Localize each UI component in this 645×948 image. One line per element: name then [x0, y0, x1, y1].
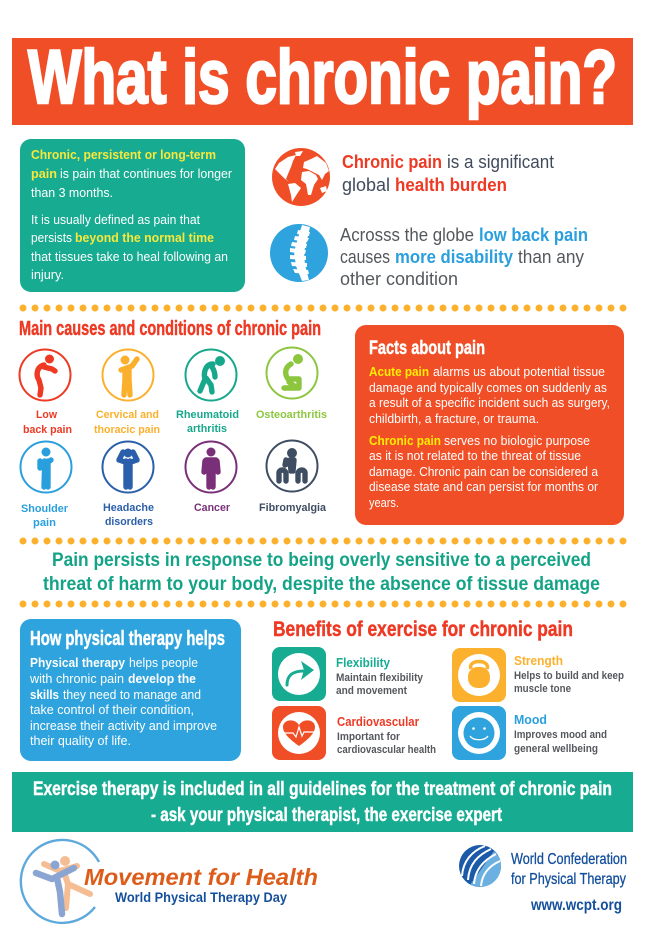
text: global health burden: health burden — [395, 175, 507, 195]
text: global health burden: is a significant — [447, 152, 554, 172]
label: osteoarthritis: Osteoarthritis — [256, 409, 327, 421]
panel: facts about pain — [355, 325, 624, 525]
icon: flexibility arrow — [272, 647, 326, 701]
panel: definition of chronic pain — [20, 139, 245, 292]
icon: low back pain — [20, 350, 70, 400]
text: pain persists statement — [43, 550, 600, 595]
logo: movement for health: Movement for Health — [84, 864, 318, 890]
text: acute pain: childbirth, a fracture, or trauma. — [369, 412, 539, 426]
logo: movement for health — [21, 840, 318, 923]
icon: strength kettlebell — [452, 648, 506, 702]
label: rheumatoid arthritis: arthritis — [187, 423, 227, 435]
label: low back pain: Low — [36, 409, 57, 421]
icon: globe — [272, 148, 330, 206]
label: fibromyalgia: Fibromyalgia — [259, 502, 327, 514]
label: low back pain: back pain — [23, 424, 72, 436]
text: physical therapy description: Physical therapy — [30, 655, 126, 670]
label: cervical and thoracic pain: thoracic pain — [94, 424, 160, 436]
text: global health burden: Chronic pain — [342, 152, 442, 172]
label: rheumatoid arthritis — [176, 409, 239, 435]
text: pain persists statement: Pain persists in response to being overly sensitive to a perceived — [52, 550, 591, 571]
text: mood — [514, 712, 607, 755]
label: shoulder pain: pain — [33, 517, 56, 529]
text: flexibility — [336, 655, 424, 697]
text: mood: Mood — [514, 712, 547, 727]
text: chronic pain: disease state and can persist for months or — [369, 480, 598, 494]
banner: exercise therapy — [12, 772, 633, 832]
text: physical therapy description — [29, 655, 217, 748]
logo: world confederation for physical therapy: www.wcpt.org — [530, 897, 622, 914]
banner: exercise therapy: - ask your physical therapist, the exercise expert — [151, 804, 502, 826]
text: physical therapy description: increase their activity and improve — [30, 718, 217, 733]
text: physical therapy description: with chronic pain — [29, 671, 124, 686]
text: cardiovascular: Cardiovascular — [337, 714, 419, 729]
text: chronic pain — [369, 434, 598, 510]
text: physical therapy description: helps people — [129, 655, 198, 670]
text: cardiovascular — [337, 714, 436, 756]
label: shoulder pain: Shoulder — [21, 503, 69, 515]
text: strength — [514, 653, 624, 695]
text: chronic pain: damage. Chronic pain can be considered a — [369, 465, 598, 479]
label: shoulder pain — [21, 503, 69, 529]
text: physical therapy description: skills — [30, 687, 59, 702]
text: low back pain disability: Acrosss the globe — [340, 225, 474, 245]
icon: rheumatoid arthritis — [186, 350, 236, 400]
text: physical therapy description: their quality of life. — [30, 733, 131, 748]
text: physical therapy description: develop the — [128, 671, 196, 686]
text: chronic pain: as it is not related to the threat of tissue — [369, 449, 581, 463]
icon: headache disorders — [102, 442, 154, 492]
text: low back pain disability: low back pain — [479, 225, 588, 245]
text: strength: muscle tone — [514, 683, 571, 695]
icon: spine — [270, 224, 328, 282]
panel: definition of chronic pain: is pain that continues for longer — [60, 167, 232, 181]
text: chronic pain: serves no biologic purpose — [444, 434, 590, 448]
label: cervical and thoracic pain: Cervical and — [96, 409, 159, 421]
panel: how physical therapy helps — [20, 619, 241, 761]
label: headache disorders — [103, 502, 154, 528]
panel: benefits of exercise — [272, 647, 624, 760]
text: low back pain disability — [340, 225, 588, 289]
label: headache disorders: Headache — [103, 502, 154, 514]
icon: fibromyalgia — [266, 440, 318, 492]
text: acute pain: Acute pain — [369, 365, 429, 379]
text: flexibility: and movement — [336, 685, 407, 697]
label: headache disorders: disorders — [105, 516, 153, 528]
heading: how physical therapy helps: How physical therapy helps — [30, 628, 225, 650]
text: low back pain disability: other condition — [340, 269, 458, 289]
panel: definition of chronic pain: injury. — [31, 268, 64, 282]
panel: definition of chronic pain: that tissues take to heal following an — [31, 250, 228, 264]
text: low back pain disability: than any — [518, 247, 584, 267]
logo: world confederation for physical therapy — [459, 845, 627, 914]
text: cardiovascular: Important for — [337, 731, 400, 743]
label: cervical and thoracic pain — [94, 409, 160, 436]
label: rheumatoid arthritis: Rheumatoid — [176, 409, 239, 421]
panel: causes and conditions — [20, 348, 327, 529]
panel: definition of chronic pain: than 3 months. — [31, 186, 113, 200]
icon: mood smiley — [452, 706, 506, 760]
text: physical therapy description: take control of their condition, — [30, 702, 194, 717]
text: acute pain: a result of a specific incident such as surgery, — [369, 396, 610, 410]
label: low back pain — [23, 409, 72, 436]
text: low back pain disability: more disability — [395, 247, 513, 267]
icon: osteoarthritis — [266, 348, 318, 398]
text: acute pain: damage and typically comes on suddenly as — [369, 381, 607, 395]
icon: cervical and thoracic pain — [102, 350, 154, 400]
text: global health burden — [342, 152, 554, 195]
panel: definition of chronic pain: Chronic, persistent or long-term — [31, 148, 216, 162]
heading: benefits of exercise: Benefits of exercise for chronic pain — [273, 617, 573, 641]
text: strength: Helps to build and keep — [514, 670, 624, 682]
text: acute pain — [369, 365, 610, 426]
logo: movement for health: World Physical Therapy Day — [115, 890, 287, 905]
text: global health burden: global — [342, 175, 390, 195]
heading: facts about pain: Facts about pain — [369, 337, 485, 359]
heading: main causes: Main causes and conditions of chronic pain — [19, 318, 321, 340]
text: strength: Strength — [514, 653, 563, 668]
text: mood: general wellbeing — [514, 743, 598, 755]
text: mood: Improves mood and — [514, 729, 607, 741]
icon: cancer — [186, 442, 236, 492]
label: cancer: Cancer — [194, 502, 231, 514]
text: physical therapy description: they need to manage and — [63, 687, 201, 702]
text: low back pain disability: causes — [340, 247, 390, 267]
text: chronic pain: years. — [369, 496, 399, 510]
panel: definition of chronic pain: pain — [31, 167, 57, 181]
panel: definition of chronic pain: beyond the normal time — [75, 231, 214, 245]
text: flexibility: Maintain flexibility — [336, 672, 424, 684]
text: chronic pain: Chronic pain — [369, 434, 441, 448]
text: acute pain: alarms us about potential tissue — [433, 365, 605, 379]
text: pain persists statement: threat of harm to your body, despite the absence of tissue damage — [43, 574, 600, 595]
text: flexibility: Flexibility — [336, 655, 391, 670]
panel: definition of chronic pain: persists — [31, 231, 72, 245]
icon: shoulder pain — [20, 442, 72, 492]
text: cardiovascular: cardiovascular health — [337, 744, 436, 756]
icon: cardiovascular heart — [272, 706, 326, 760]
panel: definition of chronic pain: It is usually defined as pain that — [31, 213, 200, 227]
